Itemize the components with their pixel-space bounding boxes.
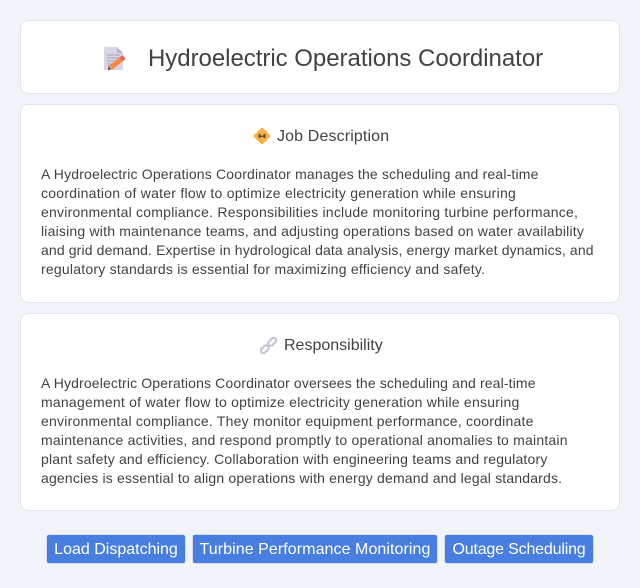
text block: responsibility: agencies is essential to align operations with energy demand and legal standards. bbox=[41, 470, 562, 486]
text block: responsibility: maintenance activities, and respond promptly to operational anomalies to maintain bbox=[41, 432, 568, 448]
heading: responsibility: Responsibility bbox=[284, 337, 383, 354]
text block: responsibility: A Hydroelectric Operations Coordinator oversees the scheduling and real-time bbox=[41, 375, 536, 391]
text block: job description: and grid demand. Expertise in hydrological data analysis, energy market dynamics, and bbox=[41, 242, 594, 258]
text block: job description: regulatory standards is essential for maximizing efficiency and safety. bbox=[41, 261, 485, 277]
tag: turbine performance monitoring bbox=[192, 534, 438, 564]
tag: load dispatching: Load Dispatching bbox=[54, 541, 178, 558]
icon: job description diamond bbox=[254, 128, 270, 144]
text block: job description: environmental compliance. Responsibilities include monitoring turbine performance, bbox=[41, 204, 578, 220]
text block: responsibility: environmental compliance. They monitor equipment performance, coordinate bbox=[41, 413, 534, 429]
icon: link bbox=[260, 337, 277, 354]
tag: turbine performance monitoring: Turbine Performance Monitoring bbox=[200, 541, 430, 558]
tag: outage scheduling: Outage Scheduling bbox=[452, 541, 586, 558]
text block: job description: A Hydroelectric Operations Coordinator manages the scheduling and real-time bbox=[41, 166, 539, 182]
panel: title bbox=[20, 20, 620, 94]
text block: responsibility bbox=[41, 375, 568, 486]
text block: job description: coordination of water flow to optimize electricity generation while ensuring bbox=[41, 185, 516, 201]
text block: job description: liaising with maintenance teams, and adjusting operations based on water availability bbox=[41, 223, 584, 239]
text block: responsibility: plant safety and efficiency. Collaboration with engineering teams and regulatory bbox=[41, 451, 548, 467]
tag: outage scheduling bbox=[444, 534, 594, 564]
panel: job description bbox=[20, 104, 620, 303]
text block: responsibility: management of water flow to optimize electricity generation while ensuring bbox=[41, 394, 519, 410]
heading: job description: Job Description bbox=[277, 128, 389, 145]
title: Hydroelectric Operations Coordinator bbox=[148, 45, 543, 72]
tag: load dispatching bbox=[46, 534, 186, 564]
panel: responsibility bbox=[20, 313, 620, 511]
icon: document with pencil bbox=[104, 47, 126, 70]
text block: job description bbox=[41, 166, 594, 277]
